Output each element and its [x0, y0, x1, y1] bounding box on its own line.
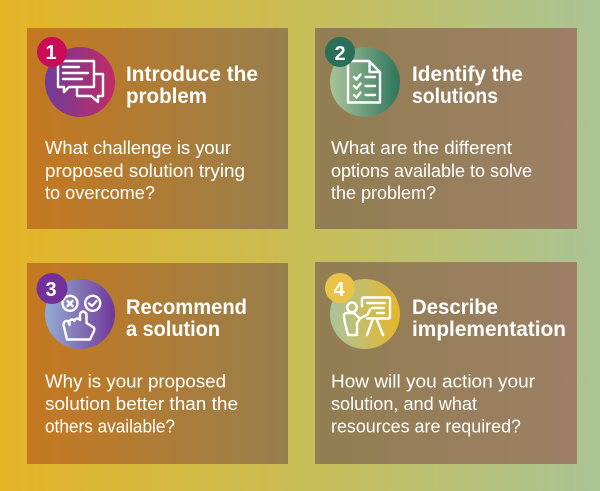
badge 4	[325, 273, 355, 303]
icon: hand choosing option	[45, 279, 115, 349]
card 1 background	[27, 28, 288, 229]
badge 4: 4	[333, 279, 345, 301]
panel: identify the solutions	[315, 28, 577, 229]
badge 2: 2	[334, 43, 346, 65]
body text 1: proposed solution trying	[45, 160, 245, 181]
badge 3	[36, 273, 68, 304]
heading 2: solutions	[412, 85, 498, 108]
badge 3: 3	[45, 279, 57, 301]
body text 2: the problem?	[331, 182, 436, 203]
body text 2: What are the different	[331, 137, 512, 158]
heading 3: a solution	[126, 318, 220, 341]
badge 2	[325, 37, 355, 67]
badge 1: 1	[45, 42, 57, 64]
heading 3: Recommend	[126, 296, 247, 319]
body text 4: How will you action your	[331, 370, 535, 392]
body text 1: What challenge is your	[45, 137, 231, 158]
panel: recommend a solution	[27, 263, 288, 464]
heading 4: implementation	[412, 318, 566, 341]
body text 3: others available?	[45, 416, 175, 436]
body text 4: solution, and what	[331, 393, 477, 414]
heading 1: Introduce the	[126, 63, 258, 86]
panel: introduce the problem	[27, 28, 288, 229]
body text 1: to overcome?	[45, 182, 155, 203]
card 2 background	[315, 28, 577, 229]
heading 4: Describe	[412, 296, 498, 319]
card 3 background	[27, 263, 288, 464]
body text 3: Why is your proposed	[45, 370, 226, 392]
icon: presenter at board	[330, 279, 400, 349]
body text 4: resources are required?	[331, 416, 521, 436]
card 4 background	[315, 262, 577, 464]
body text 3: solution better than the	[45, 393, 238, 414]
badge 1	[37, 37, 67, 67]
body text 2: options available to solve	[331, 160, 532, 181]
icon: speech bubbles	[45, 47, 115, 117]
heading 2: Identify the	[412, 63, 523, 86]
heading 1: problem	[126, 85, 207, 108]
panel: describe implementation	[315, 262, 577, 464]
icon: checklist document	[330, 47, 400, 117]
